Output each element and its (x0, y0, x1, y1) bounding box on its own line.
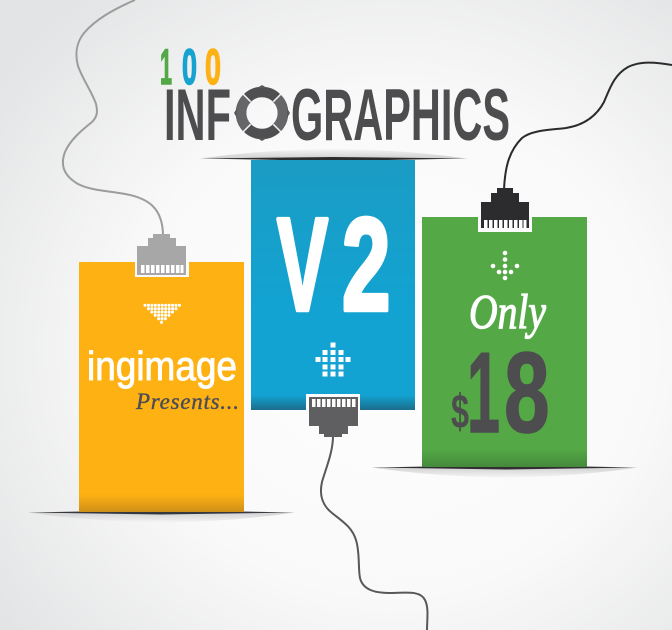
logo: infographics wordmark: INF (164, 75, 231, 156)
cable: gray (63, 0, 163, 236)
panel: blue (251, 160, 415, 437)
price: $18: 8 (504, 330, 550, 457)
title: V2: V (277, 190, 328, 338)
logo: infographics wordmark (164, 75, 510, 156)
slot shadow: green panel (372, 465, 638, 477)
logo: 100: 0 (182, 39, 197, 95)
price: $18: 1 (467, 330, 500, 457)
price: $18 (451, 330, 550, 457)
text: Only: Only (469, 284, 546, 339)
slot shadow: orange panel (28, 510, 295, 522)
icon: dotted arrow up (318, 345, 348, 374)
panel: green (422, 188, 587, 467)
icon: dotted triangle (145, 305, 180, 322)
logo: 100: 0 (205, 39, 221, 95)
price: $18: $ (451, 386, 469, 439)
title: V2 (277, 190, 390, 338)
connector: gray (137, 234, 186, 275)
logo: infographics wordmark: GRAPHICS (291, 75, 510, 156)
logo: ring icon (234, 85, 290, 141)
text: Presents: Presents... (135, 389, 239, 414)
title: V2: 2 (342, 191, 390, 338)
panel: orange (79, 234, 244, 512)
slot shadow: blue panel (200, 149, 467, 161)
brand: ingimage: ingimage (87, 343, 237, 389)
icon: dotted arrow down (493, 253, 517, 278)
logo: 100: 1 (160, 39, 172, 95)
cable: mid gray (321, 436, 428, 630)
logo: 100 (160, 39, 221, 95)
cable: dark (504, 63, 672, 190)
connector: dark (481, 188, 529, 228)
connector: mid gray (309, 397, 358, 437)
